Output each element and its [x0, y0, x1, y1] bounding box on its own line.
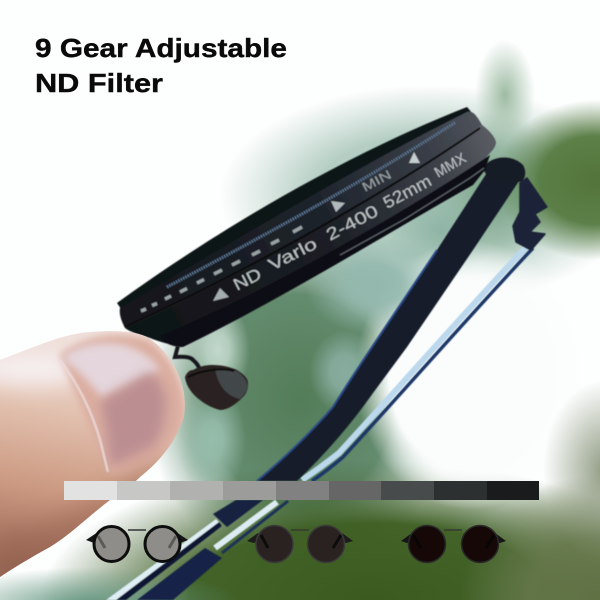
finger [0, 331, 190, 590]
title: 9 Gear Adjustable [35, 33, 287, 63]
MIN label: MIN [359, 167, 394, 195]
ND filter body [117, 107, 496, 347]
title [35, 33, 287, 98]
sunglasses: light tint [86, 526, 188, 562]
nail pale lunula [62, 343, 160, 398]
model label: 52mm [380, 171, 435, 213]
sunglasses: dark tint [401, 526, 506, 562]
dash scale [141, 227, 302, 311]
temple arm: thin rear wire [215, 244, 533, 553]
upper ring [120, 112, 482, 328]
clip hook and pad [175, 346, 248, 410]
marker triangles [213, 288, 229, 301]
lower shadow [0, 458, 159, 577]
model label: 2-400 [323, 201, 381, 245]
model label: MMX [432, 150, 469, 181]
nail body [100, 372, 166, 467]
gradient density bar [64, 481, 539, 500]
title: ND Filter [35, 68, 163, 98]
pink fingertip rim [60, 335, 184, 475]
model label: ND [230, 264, 265, 295]
filter rim top [117, 107, 478, 322]
ring gap line [125, 128, 480, 327]
rubber sleeves and lower wires [106, 500, 263, 600]
sunglasses: medium tint [247, 526, 353, 562]
nail fold [60, 360, 108, 472]
arm hinge curl [482, 157, 525, 182]
arm hinge [513, 178, 547, 250]
knurling [167, 122, 456, 287]
temple arm: thick front arm [257, 157, 525, 481]
light band [302, 244, 529, 480]
model label [230, 150, 469, 295]
cool highlight on top [0, 350, 90, 386]
lower ring [125, 125, 496, 346]
mount lower band [160, 155, 490, 347]
model label: Varlo [265, 234, 320, 275]
